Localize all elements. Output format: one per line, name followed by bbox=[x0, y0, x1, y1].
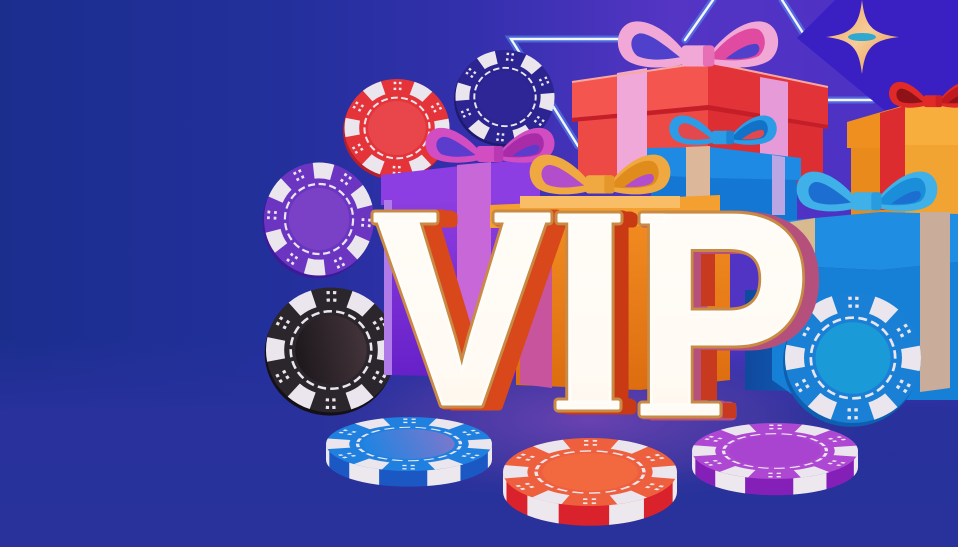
VIP lettering bbox=[374, 152, 810, 476]
gift: orange right bbox=[847, 82, 958, 230]
neon star outline bbox=[511, 0, 873, 146]
bow: light blue bbox=[797, 172, 937, 211]
P stem and counter shading bbox=[701, 254, 736, 418]
floor bbox=[0, 335, 958, 547]
chip: black bbox=[255, 277, 407, 423]
flat chip: red bbox=[488, 432, 692, 530]
bow: red bbox=[889, 82, 958, 108]
flat chip: purple bbox=[678, 418, 872, 499]
letter P: P bbox=[634, 152, 810, 476]
letter V: V bbox=[374, 154, 550, 463]
gift: orange centre bbox=[490, 155, 730, 390]
dark triangle panel bbox=[797, 0, 958, 112]
letter V: V bbox=[374, 154, 550, 463]
bow: blue bbox=[669, 116, 777, 145]
letter I: I bbox=[551, 156, 629, 468]
bow: gold bbox=[530, 155, 670, 194]
chip: purple bbox=[242, 140, 396, 298]
icon: four-point star bbox=[826, 0, 899, 74]
gift: red bbox=[572, 21, 828, 185]
gift: blue right bbox=[745, 172, 958, 400]
chip: red bbox=[335, 71, 459, 185]
gift: blue middle bbox=[647, 116, 801, 225]
letter I: I bbox=[551, 156, 629, 468]
letter P: P bbox=[634, 152, 810, 476]
flat chip: blue bbox=[312, 412, 506, 490]
bow: pink bbox=[618, 21, 778, 68]
chip: blue standing bbox=[773, 282, 933, 434]
bow: magenta bbox=[425, 128, 555, 163]
chip: navy bbox=[451, 46, 559, 148]
gift: purple bbox=[381, 128, 555, 378]
